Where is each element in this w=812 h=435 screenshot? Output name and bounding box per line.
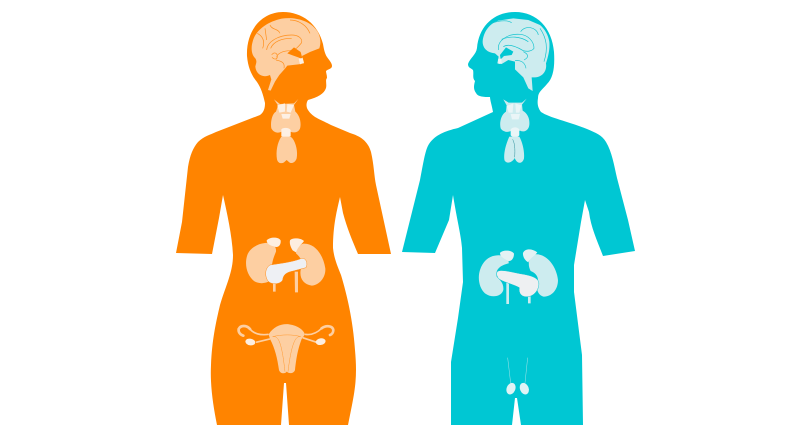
body silhouette: female <box>176 12 391 425</box>
kidneys, adrenals and pancreas <box>479 249 558 304</box>
testes and vas deferens <box>505 358 531 396</box>
body silhouette: male <box>402 12 635 425</box>
thyroid and thymus <box>500 99 529 163</box>
thyroid and thymus <box>271 99 301 163</box>
uterus and ovaries <box>239 324 333 373</box>
female figure <box>176 12 391 425</box>
brain <box>483 18 549 91</box>
pituitary and hypothalamus <box>287 47 303 59</box>
pituitary and hypothalamus <box>500 47 513 59</box>
kidneys, adrenals and pancreas <box>246 238 325 292</box>
brain <box>252 18 320 91</box>
male figure <box>402 12 635 425</box>
